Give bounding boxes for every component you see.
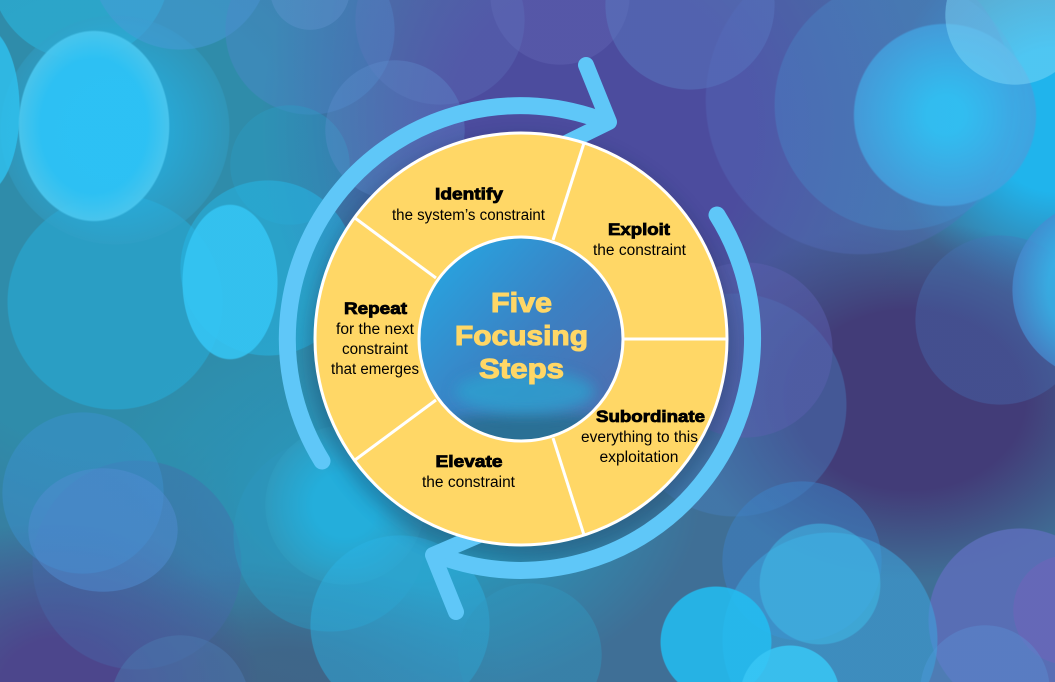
wheel shadow	[309, 136, 733, 560]
step: Exploit: the constraint	[593, 242, 687, 259]
step: Repeat: for the next	[336, 321, 415, 338]
centre title: Steps	[479, 353, 564, 384]
centre title	[455, 287, 588, 384]
arrow: upper loop	[287, 65, 609, 461]
step: Repeat: constraint	[342, 341, 409, 358]
step: Subordinate: everything to this	[581, 429, 698, 446]
centre title: Five	[491, 287, 552, 318]
step: Repeat: Repeat	[344, 300, 408, 318]
step: Identify: the system’s constraint	[392, 207, 546, 224]
step: Elevate	[422, 453, 516, 491]
centre hub	[418, 236, 624, 442]
step: Elevate: the constraint	[422, 474, 516, 491]
step: Identify: Identify	[435, 186, 504, 204]
centre title: Focusing	[455, 320, 588, 351]
step: Exploit	[593, 221, 687, 259]
step: Subordinate	[581, 408, 705, 466]
step: Exploit: Exploit	[608, 221, 671, 239]
arrow: lower loop	[433, 215, 753, 612]
step: Repeat	[331, 300, 419, 378]
wheel: five segments	[315, 133, 727, 545]
step: Subordinate: Subordinate	[596, 408, 705, 426]
step: Elevate: Elevate	[436, 453, 502, 471]
step: Identify	[392, 186, 546, 224]
step: Repeat: that emerges	[331, 361, 419, 378]
step: Subordinate: exploitation	[600, 449, 678, 466]
